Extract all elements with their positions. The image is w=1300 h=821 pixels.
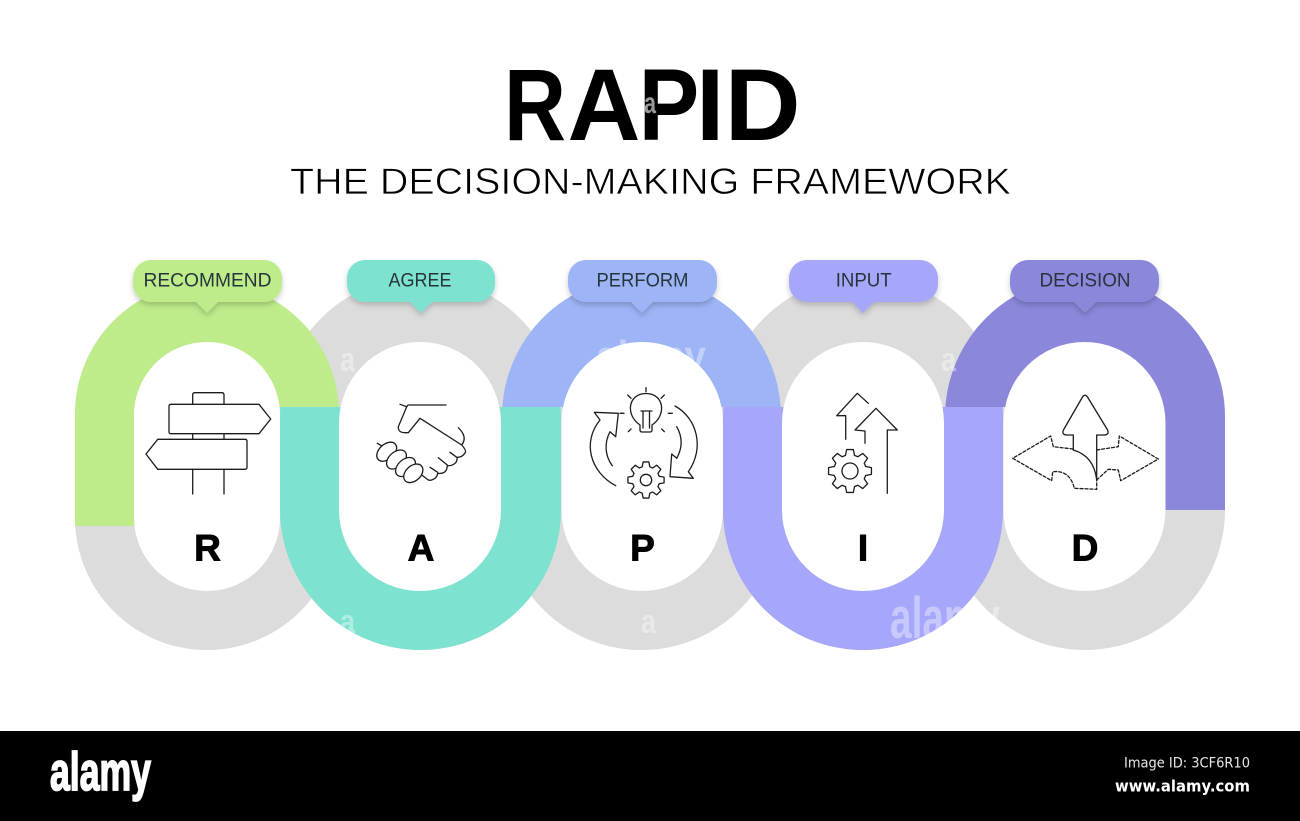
title: I (696, 48, 724, 162)
title: P (639, 48, 699, 162)
icon: rising arrows and gear (829, 393, 897, 493)
watermarks over ribbons: alamy (596, 332, 707, 379)
tag: DECISION: DECISION (1040, 271, 1130, 292)
tag: DECISION (1010, 260, 1159, 313)
inner white capsule R (134, 342, 280, 591)
panel: Input (782, 260, 944, 591)
tag: PERFORM (568, 260, 717, 313)
letter A: A (408, 528, 434, 568)
title: R (504, 48, 566, 162)
coloured ribbon layer (75, 277, 1225, 650)
panel: Decision (1004, 260, 1166, 591)
watermarks over ribbons: a (340, 341, 356, 379)
watermarks over ribbons: a (340, 603, 356, 641)
tag: INPUT: INPUT (836, 271, 892, 292)
watermarks over ribbons: a (941, 341, 957, 379)
subtitle: THE DECISION-MAKING FRAMEWORK (290, 161, 1011, 202)
icon: bulb, cycle arrows and gear (590, 388, 697, 498)
tag: AGREE (347, 260, 495, 313)
watermarks over ribbons (340, 332, 1000, 651)
inner white capsule P (562, 342, 723, 591)
icon: handshake (373, 404, 466, 486)
title: A (568, 48, 640, 162)
watermarks over ribbons: alamy (890, 586, 1000, 651)
footer image id: Image ID: 3CF6R10 (1124, 756, 1250, 772)
tag: PERFORM: PERFORM (596, 271, 688, 292)
tag: RECOMMEND: RECOMMEND (144, 271, 272, 292)
inner white capsule A (339, 342, 501, 591)
watermarks over ribbons: a (641, 603, 657, 641)
tag: AGREE: AGREE (388, 271, 452, 292)
icon: signpost (146, 393, 271, 494)
icon: three-way arrows (1013, 395, 1158, 489)
inner white capsule D (1004, 342, 1166, 591)
panel: Recommend (133, 260, 282, 591)
inner white capsule I (782, 342, 944, 591)
letter P: P (630, 528, 655, 568)
grey ring layer (75, 277, 1225, 650)
letter I: I (858, 528, 868, 568)
letter D: D (1072, 528, 1098, 568)
tag: INPUT (789, 260, 938, 313)
letter R: R (194, 528, 221, 568)
tag: RECOMMEND (133, 260, 282, 313)
panel: Perform (562, 260, 723, 591)
footer logo: alamy (50, 742, 151, 802)
title: D (725, 48, 801, 162)
panel: Agree (339, 260, 501, 591)
footer url: www.alamy.com (1115, 777, 1250, 796)
title watermark: a (644, 87, 656, 120)
footer bar (0, 731, 1300, 821)
